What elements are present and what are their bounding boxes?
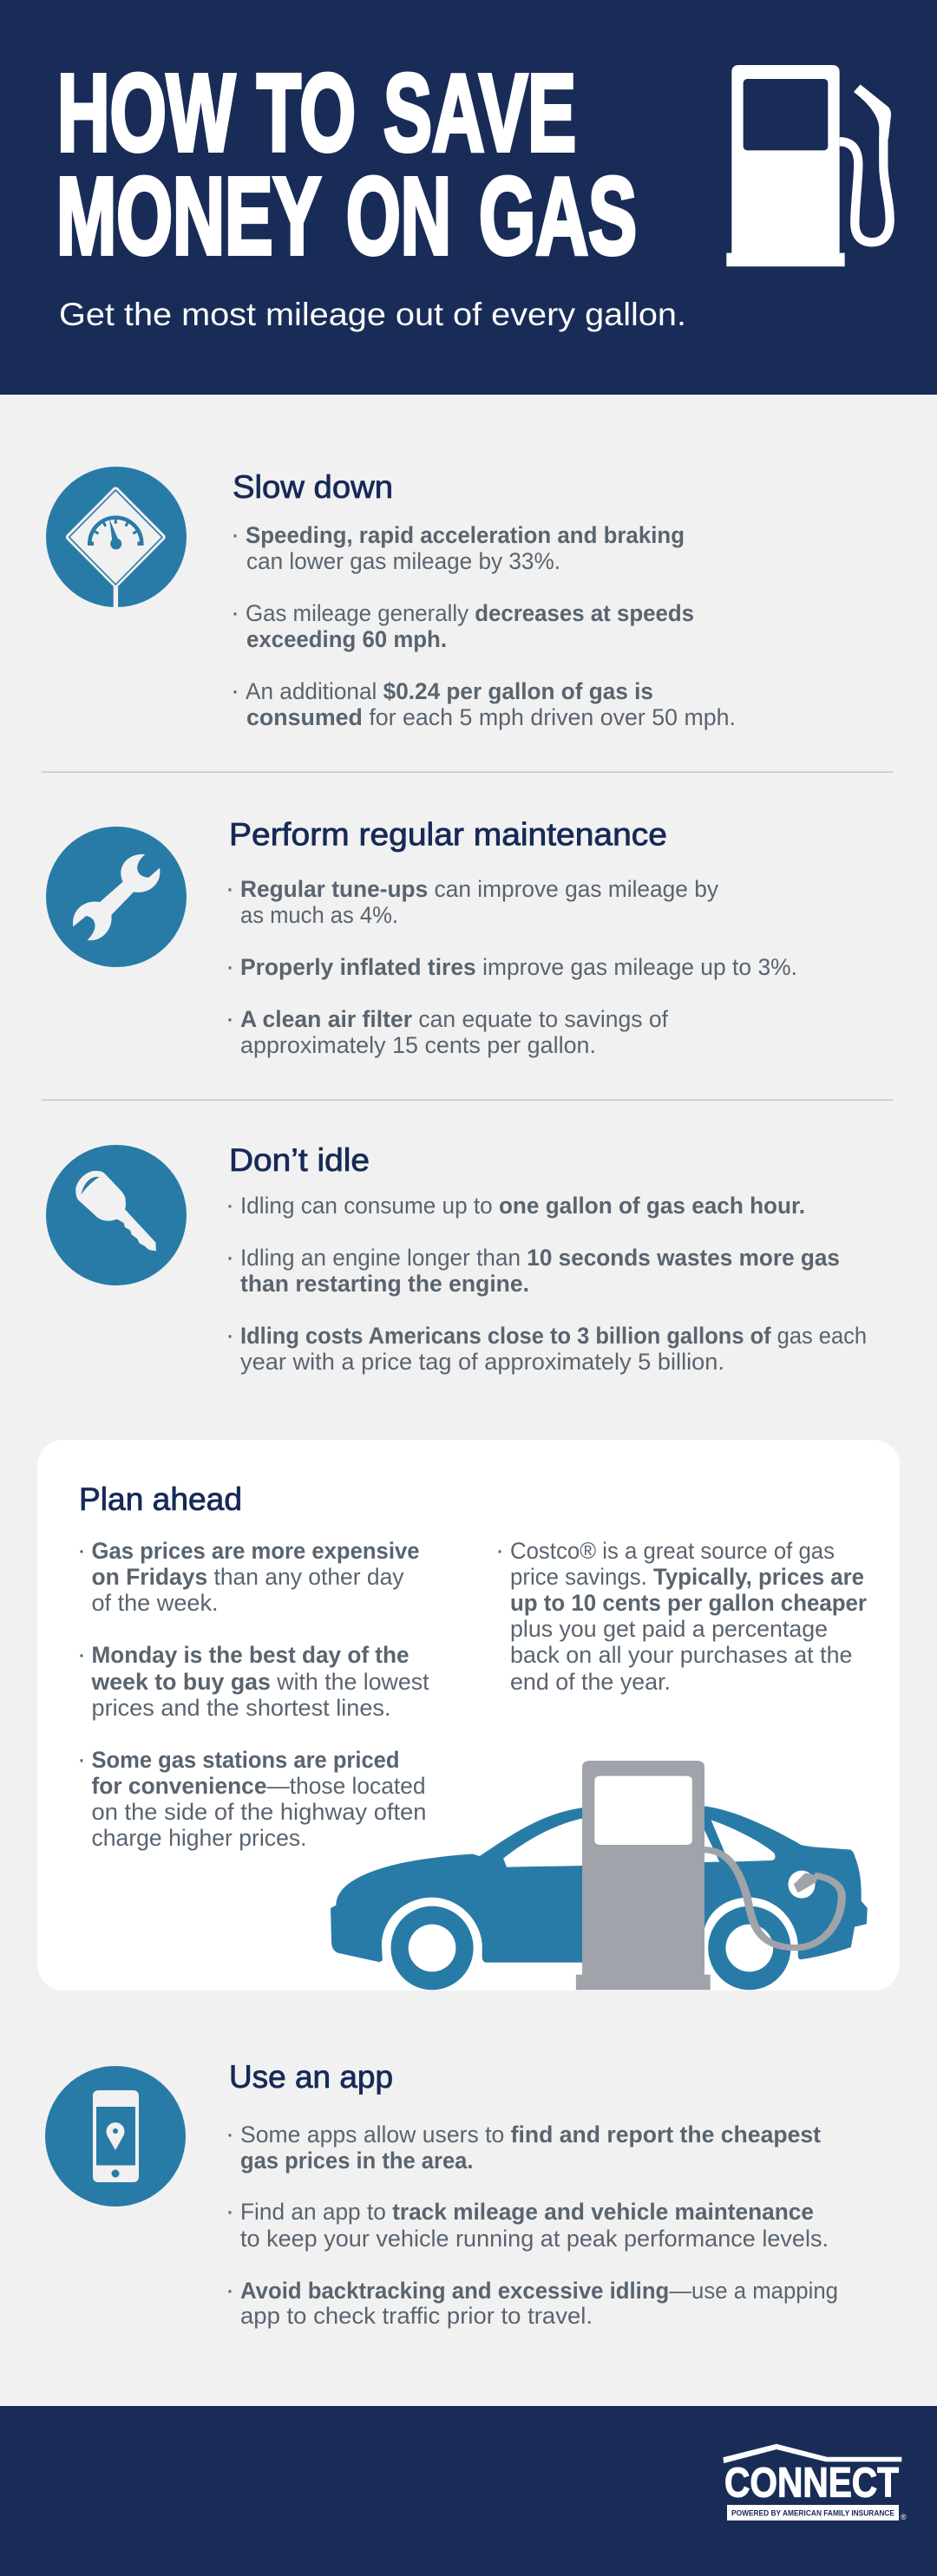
bullet: convenience: Some gas stations are priced (92, 1747, 399, 1773)
gas pump (576, 1761, 711, 1990)
bullet: tune-ups (226, 874, 719, 928)
heading: slow down: Slow down (233, 469, 393, 505)
bullet: monday: prices and the shortest lines. (92, 1695, 390, 1721)
bullet: decreases (231, 598, 694, 652)
title: SAVE (383, 52, 576, 173)
bullet: monday: Monday is the best day of the (92, 1642, 410, 1668)
header banner (0, 0, 937, 395)
bullet: costco: price savings. Typically, prices are (510, 1564, 864, 1590)
heading: maintenance: Perform regular maintenance (229, 817, 667, 852)
icon: road sign with speedometer (46, 467, 187, 609)
heading: plan ahead: Plan ahead (79, 1481, 242, 1517)
bullet: convenience: for convenience—those located (92, 1773, 425, 1799)
bullet: additional cost (231, 677, 736, 730)
bullet: fridays: · (77, 1536, 86, 1565)
bullet: fridays: on Fridays than any other day (92, 1564, 404, 1590)
title (56, 52, 637, 278)
heading: don't idle: Don’t idle (229, 1142, 370, 1178)
bullet: additional cost: An additional $0.24 per gallon of gas is (246, 678, 653, 704)
logo: connect: CONNECT (724, 2460, 899, 2507)
bullet: 3 billion gallons: year with a price tag of approximately 5 billion. (240, 1349, 724, 1375)
bullet: tires: Properly inflated tires improve gas mileage up to 3%. (240, 954, 797, 980)
bullet: track mileage: · (226, 2197, 234, 2226)
bullet: tires: · (226, 952, 234, 981)
bullet: 10 seconds (226, 1243, 840, 1297)
bullet: 10 seconds: than restarting the engine. (240, 1271, 529, 1297)
bullet: monday (77, 1640, 429, 1721)
bullet: monday: · (77, 1640, 86, 1669)
bullet: costco: end of the year. (510, 1669, 671, 1695)
bullet: costco: back on all your purchases at the (510, 1642, 852, 1668)
bullet: avoid backtracking: app to check traffic prior to travel. (240, 2303, 593, 2329)
logo: connect (723, 2444, 907, 2521)
icon: phone with map pin (45, 2066, 186, 2207)
logo: connect: ® (901, 2513, 907, 2521)
title: GAS (479, 154, 637, 278)
title: ON (346, 154, 451, 278)
bullet: tune-ups: Regular tune-ups can improve gas mileage by (240, 876, 719, 902)
panel: plan ahead card (37, 1440, 900, 1991)
car body (331, 1806, 868, 1990)
fuel hose and nozzle (704, 1850, 842, 1948)
bullet: speeding: Speeding, rapid acceleration and braking (246, 522, 685, 548)
bullet: convenience: on the side of the highway often (92, 1799, 427, 1825)
bullet: fridays: Gas prices are more expensive (92, 1538, 420, 1564)
bullet: tune-ups: as much as 4%. (240, 902, 398, 928)
bullet: avoid backtracking: · (226, 2276, 234, 2305)
bullet: find cheapest (226, 2120, 821, 2174)
illustration: car at gas pump (331, 1761, 868, 1990)
bullet: costco: up to 10 cents per gallon cheaper (510, 1590, 867, 1616)
bullet: 3 billion gallons (226, 1321, 867, 1375)
bullet: costco: plus you get paid a percentage (510, 1616, 828, 1642)
logo: connect: POWERED BY AMERICAN FAMILY INSURANCE (731, 2509, 894, 2519)
bullet: one gallon: Idling can consume up to one gallon of gas each hour. (240, 1193, 805, 1219)
panel: slow down (46, 467, 736, 730)
bullet: speeding: can lower gas mileage by 33%. (246, 548, 560, 574)
bullet: convenience: charge higher prices. (92, 1825, 307, 1851)
bullet: 10 seconds: Idling an engine longer than 10 seconds wastes more gas (240, 1245, 840, 1271)
bullet: tune-ups: · (226, 874, 234, 903)
bullet: track mileage (226, 2197, 829, 2252)
panel: use an app (45, 2059, 838, 2329)
bullet: track mileage: to keep your vehicle running at peak performance levels. (240, 2226, 829, 2252)
bullet: convenience: · (77, 1745, 86, 1774)
bullet: find cheapest: · (226, 2120, 234, 2148)
bullet: speeding: · (231, 520, 239, 549)
bullet: track mileage: Find an app to track mileage and vehicle maintenance (240, 2199, 814, 2225)
bullet: avoid backtracking: Avoid backtracking and excessive idling—use a mapping (240, 2278, 838, 2304)
panel: don't idle (46, 1142, 867, 1375)
bullet: air filter (226, 1004, 669, 1058)
title: MONEY (56, 154, 321, 278)
bullet: costco (495, 1536, 867, 1695)
bullet: additional cost: · (231, 677, 239, 705)
subtitle: Get the most mileage out of every gallon. (59, 297, 686, 332)
bullet: convenience (77, 1745, 427, 1851)
bullet: costco: Costco® is a great source of gas (510, 1538, 835, 1564)
bullet: air filter: approximately 15 cents per gallon. (240, 1032, 596, 1058)
bullet: fridays (77, 1536, 420, 1616)
heading: use an app: Use an app (229, 2059, 393, 2095)
bullet: fridays: of the week. (92, 1590, 219, 1616)
bullet: decreases: exceeding 60 mph. (246, 626, 447, 652)
icon: car key (46, 1145, 187, 1285)
bullet: avoid backtracking (226, 2276, 838, 2329)
bullet: air filter: · (226, 1004, 234, 1033)
footer band (0, 2406, 937, 2576)
bullet: decreases: · (231, 598, 239, 627)
title: HOW (57, 52, 235, 173)
bullet: find cheapest: Some apps allow users to find and report the cheapest (240, 2122, 821, 2148)
bullet: air filter: A clean air filter can equate to savings of (240, 1006, 669, 1032)
bullet: 3 billion gallons: · (226, 1321, 234, 1350)
title: TO (257, 52, 356, 173)
bullet: 3 billion gallons: Idling costs Americans close to 3 billion gallons of gas each (240, 1323, 867, 1349)
icon: wrench (46, 827, 187, 967)
bullet: decreases: Gas mileage generally decreases at speeds (246, 600, 694, 626)
icon: gas pump (726, 65, 891, 266)
bullet: find cheapest: gas prices in the area. (240, 2148, 474, 2174)
bullet: additional cost: consumed for each 5 mph driven over 50 mph. (246, 704, 736, 730)
bullet: monday: week to buy gas with the lowest (90, 1669, 429, 1695)
bullet: costco: · (495, 1536, 504, 1565)
bullet: 10 seconds: · (226, 1243, 234, 1272)
bullet: one gallon: · (226, 1191, 234, 1219)
panel: regular maintenance (46, 817, 797, 1058)
bullet: speeding (231, 520, 685, 574)
